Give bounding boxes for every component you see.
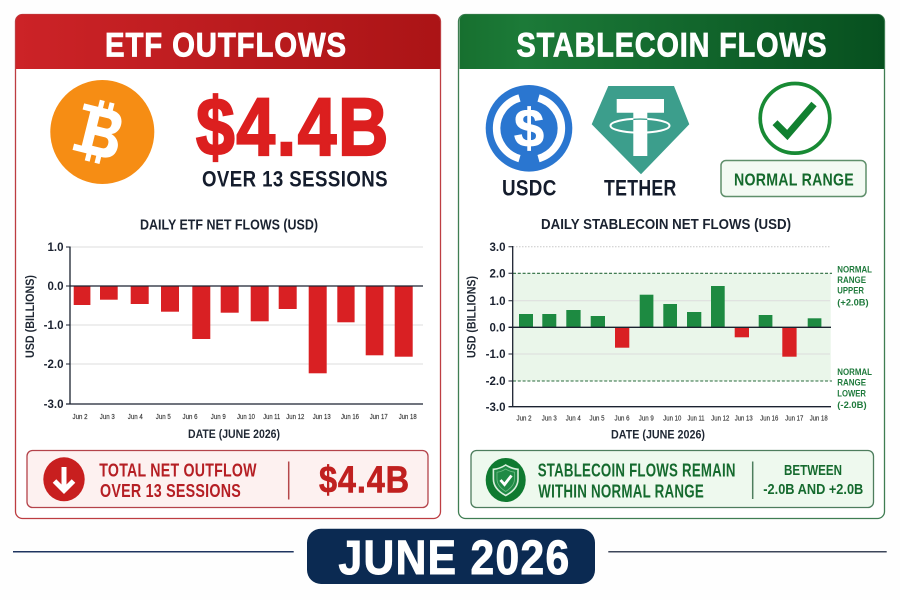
label: tether: TETHER [604, 176, 677, 200]
icon: down arrow [43, 457, 85, 501]
bar chart: daily stablecoin net flows: -1.0 [486, 349, 506, 361]
label: normal range lower: NORMAL [837, 367, 872, 378]
callout range values: -2.0B AND +2.0B [763, 482, 863, 498]
bar chart: daily ETF net flows: Jun 12 [286, 412, 304, 421]
chart title: DAILY STABLECOIN NET FLOWS (USD) [541, 216, 791, 233]
bar chart: daily ETF net flows: Jun 9 [211, 412, 226, 421]
panel: ETF outflows [16, 14, 440, 518]
header: stablecoin flows [459, 14, 884, 69]
bar chart: daily stablecoin net flows: 0.0 [490, 322, 506, 334]
bar chart: daily ETF net flows: Jun 13 [313, 412, 331, 421]
header: ETF outflows [16, 14, 440, 69]
bar chart: daily ETF net flows: Jun 3 [100, 412, 115, 421]
bar chart: daily stablecoin net flows: Jun 17 [785, 414, 803, 422]
callout: total net outflow [27, 450, 428, 508]
bar chart: daily ETF net flows: 0.0 [48, 281, 64, 293]
date badge: JUNE 2026 [338, 532, 570, 585]
bar chart: daily ETF net flows: Jun 5 [156, 412, 171, 421]
bar chart: daily stablecoin net flows: Jun 5 [590, 414, 604, 422]
bar chart: daily ETF net flows: USD (BILLIONS) [25, 275, 37, 358]
bar chart: daily ETF net flows: Jun 4 [128, 412, 143, 421]
bar chart: daily stablecoin net flows: Jun 18 [810, 414, 828, 422]
callout text: OVER 13 SESSIONS [100, 481, 241, 501]
bar chart: daily stablecoin net flows: Jun 12 [711, 414, 729, 422]
callout text: WITHIN NORMAL RANGE [538, 482, 704, 502]
bar chart: daily ETF net flows: Jun 10 [237, 412, 255, 421]
bar chart: daily stablecoin net flows: Jun 2 [516, 414, 532, 422]
bar chart: daily stablecoin net flows: Jun 10 [663, 414, 681, 422]
badge: normal range [721, 160, 866, 196]
label: normal range lower: RANGE [837, 378, 866, 389]
icon: bitcoin [50, 80, 154, 184]
label: normal range lower: LOWER [837, 388, 866, 399]
icon: shield check [486, 458, 526, 502]
bar chart: daily ETF net flows: Jun 11 [263, 412, 280, 421]
bar chart: daily stablecoin net flows: Jun 6 [614, 414, 630, 422]
bar chart: daily stablecoin net flows: Jun 16 [760, 414, 778, 422]
bar chart: daily stablecoin net flows: Jun 11 [688, 414, 704, 422]
panel: stablecoin flows [458, 14, 884, 518]
bar chart: daily ETF net flows: 1.0 [48, 242, 64, 254]
icon: check circle [760, 84, 830, 153]
header: ETF outflows: ETF OUTFLOWS [105, 26, 347, 64]
bar chart: daily ETF net flows: Jun 18 [399, 412, 417, 421]
bar chart: daily stablecoin net flows: Jun 3 [542, 414, 557, 422]
label: normal range upper: UPPER [837, 286, 864, 297]
bar chart: daily stablecoin net flows: 2.0 [490, 268, 506, 280]
icon: tether [592, 86, 689, 174]
bar chart: daily stablecoin net flows: -2.0 [486, 376, 506, 388]
callout value: $4.4B [319, 460, 410, 502]
bar chart: daily ETF net flows [25, 242, 423, 441]
bar chart: daily ETF net flows: Jun 16 [341, 412, 359, 421]
chart title: DAILY ETF NET FLOWS (USD) [140, 216, 318, 234]
bar chart: daily stablecoin net flows [466, 242, 872, 442]
bar chart: daily ETF net flows: -1.0 [44, 320, 64, 332]
bar chart: daily ETF net flows: Jun 2 [72, 412, 88, 421]
callout: within normal range [471, 450, 874, 508]
subheading: OVER 13 SESSIONS [202, 166, 388, 192]
icon: USDC [486, 85, 572, 172]
label: normal range lower: (-2.0B) [837, 400, 867, 411]
bar chart: daily ETF net flows: DATE (JUNE 2026) [188, 429, 280, 441]
bar chart: daily ETF net flows: Jun 6 [182, 412, 198, 421]
label: normal range upper: (+2.0B) [837, 298, 869, 308]
callout range values: BETWEEN [784, 463, 842, 479]
bar chart: daily stablecoin net flows: USD (BILLIONS) [466, 276, 478, 358]
label: normal range upper: NORMAL [837, 264, 872, 276]
bar chart: daily stablecoin net flows: -3.0 [486, 402, 506, 414]
bar chart: daily stablecoin net flows: Jun 13 [735, 414, 753, 422]
big number: $4.4B [196, 82, 390, 173]
label: USDC: USDC [502, 176, 557, 200]
bar chart: daily stablecoin net flows: DATE (JUNE 2026) [611, 430, 705, 442]
bar chart: daily ETF net flows: -2.0 [44, 359, 64, 371]
label: normal range upper: RANGE [837, 275, 866, 286]
callout text: TOTAL NET OUTFLOW [99, 460, 257, 480]
icon: USDC: $ [514, 98, 544, 158]
callout text: STABLECOIN FLOWS REMAIN [538, 460, 736, 480]
bar chart: daily stablecoin net flows: 1.0 [490, 296, 506, 308]
bar chart: daily stablecoin net flows: Jun 9 [639, 414, 654, 422]
bar chart: daily ETF net flows: -3.0 [44, 399, 64, 411]
bar chart: daily stablecoin net flows: 3.0 [490, 242, 506, 254]
bar chart: daily stablecoin net flows: Jun 4 [566, 414, 581, 422]
bar chart: daily ETF net flows: Jun 17 [370, 412, 388, 421]
header: stablecoin flows: STABLECOIN FLOWS [516, 26, 828, 64]
badge: normal range: NORMAL RANGE [734, 170, 854, 190]
